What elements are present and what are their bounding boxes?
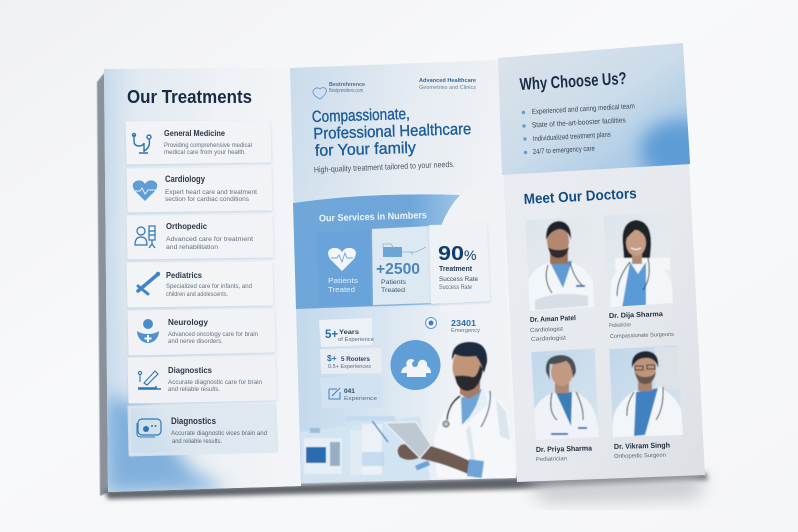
stat: years of experience: of Experience xyxy=(338,337,374,343)
card: neurology: Advanced oncology care for brain xyxy=(168,331,258,338)
stat: emergency: Emergency xyxy=(451,328,480,334)
stat: patients treated: Treated xyxy=(328,285,355,294)
lower section background xyxy=(296,300,516,483)
card: general medicine xyxy=(127,122,270,163)
specialty: Pediatrician xyxy=(536,456,567,463)
stat: years of experience: Years xyxy=(339,329,359,336)
panel: why choose us and doctors xyxy=(498,43,720,482)
stat: experience count: 041 xyxy=(344,388,355,395)
card: general medicine: medical care from your health. xyxy=(164,149,246,156)
stat: doctors xyxy=(321,349,381,373)
doctor card: Dija Sharma: Compassionate Surgeons xyxy=(610,332,674,340)
right side pale curve xyxy=(440,176,507,312)
stat: emergency xyxy=(426,318,480,334)
section heading: Our Services in Numbers xyxy=(319,210,427,224)
header right text xyxy=(419,78,477,91)
stat: doctors: 0.5+ Experiences xyxy=(328,364,372,370)
card: pediatrics: Specialized care for infants, and xyxy=(166,283,252,290)
panel: our treatments xyxy=(104,68,301,492)
stat: 2500 patients: Patients xyxy=(381,279,407,286)
icon: stethoscope xyxy=(132,134,151,153)
card: neurology xyxy=(129,310,274,354)
title: Professional Healthcare xyxy=(313,121,472,143)
brochure drop shadows xyxy=(97,72,708,502)
card: pediatrics xyxy=(128,263,272,306)
card: orthopedic: Advanced care for treatment xyxy=(166,236,253,243)
stat: doctors: $+ xyxy=(327,353,337,363)
card: cardiology: section for cardiac conditions xyxy=(165,196,250,203)
card: orthopedic: Orthopedic xyxy=(166,221,207,231)
name: Dr. Priya Sharma xyxy=(536,444,593,454)
card: diagnostics: Diagnostics xyxy=(168,365,212,375)
doctor card: Dija Sharma xyxy=(603,213,675,340)
stat: patients treated: Patients xyxy=(328,276,358,285)
stat: years of experience: 5+ xyxy=(325,329,338,341)
stat: 90 percent: Success Rate xyxy=(439,285,473,291)
benefits list xyxy=(522,101,635,156)
header right text: Geometries and Clinics xyxy=(419,85,476,91)
stat: 2500 patients xyxy=(372,226,432,305)
card: pediatrics: Pediatrics xyxy=(166,270,202,280)
card: diagnostics: and reliable results. xyxy=(168,386,220,393)
why choose us background xyxy=(498,43,690,175)
specialty: Orthopedic Surgeon xyxy=(614,453,666,460)
icon: diagnostics monitor xyxy=(137,419,161,437)
benefits list: Individualized treatment plans xyxy=(533,130,611,143)
stat: years of experience xyxy=(320,319,374,346)
panel background xyxy=(290,60,516,483)
icon: care team circle xyxy=(390,340,440,390)
card: cardiology: Expert heart care and treatment xyxy=(165,189,257,196)
card: pediatrics: children and adolescents. xyxy=(166,291,228,298)
icon: chart box xyxy=(329,388,340,399)
doctor card: Aman Patel xyxy=(525,216,596,343)
header logo: Bestreference xyxy=(329,82,365,88)
name: Dr. Dija Sharma xyxy=(609,311,663,320)
card: orthopedic: and rehabilitation xyxy=(166,244,218,251)
specialty: Pediatrician xyxy=(609,322,631,329)
title: Compassionate, xyxy=(312,106,410,126)
stat: experience count: Experience xyxy=(344,396,377,402)
icon: orthopedic figure xyxy=(135,226,155,248)
specialty: Cardiologist xyxy=(530,327,563,334)
title xyxy=(312,104,472,160)
card: diagnostics devices xyxy=(129,405,277,455)
heading: meet our doctors: Meet Our Doctors xyxy=(523,186,637,208)
benefits list: State of the-art-booster facilities xyxy=(532,115,626,129)
icon: heart xyxy=(133,180,157,201)
photo xyxy=(609,345,685,438)
heading: Our Treatments xyxy=(127,87,252,107)
card: diagnostics xyxy=(129,357,275,402)
icon: heart pulse xyxy=(328,248,356,271)
stat: 90 percent xyxy=(430,225,489,303)
benefits list: Experienced and caring medical team xyxy=(532,101,635,116)
stat: 2500 patients: +2500 xyxy=(376,261,420,278)
icon: diagnostics instrument xyxy=(138,371,161,389)
photo xyxy=(531,348,600,441)
name: Dr. Aman Patel xyxy=(530,315,576,324)
doctor card: Priya Sharma xyxy=(531,348,600,463)
stat: 90 percent: Success Rate xyxy=(439,276,478,283)
stat: doctors: 5 Rooters xyxy=(341,356,370,363)
lower sheet background xyxy=(498,43,705,482)
card: neurology: and nerve disorders. xyxy=(168,338,223,345)
benefits list: 24/7 to emergency care xyxy=(533,144,595,156)
card: orthopedic xyxy=(128,216,272,258)
header right text: Advanced Healthcare xyxy=(419,78,477,84)
stat: 90 percent: % xyxy=(464,247,476,263)
illustration: doctor with tablet xyxy=(385,342,515,478)
header logo: Bestproviders.com xyxy=(329,88,363,94)
card: diagnostics: Accurate diagnostic care for brain xyxy=(168,379,262,386)
subtitle: High-quality treatment tailored to your needs. xyxy=(314,160,455,174)
panel: center cover xyxy=(290,60,516,484)
illustration: hospital equipment xyxy=(300,416,430,484)
panel background xyxy=(104,68,301,492)
services section background xyxy=(293,194,460,309)
stat: experience count xyxy=(320,375,383,408)
card: diagnostics devices: Accurate diagnostic vices brain and xyxy=(171,430,267,437)
stat: 2500 patients: Treated xyxy=(381,287,405,294)
card: general medicine: Providing comprehensive medical xyxy=(164,142,252,149)
photo xyxy=(603,213,675,308)
icon: bone xyxy=(138,273,159,294)
stat: 90 percent: Treatment xyxy=(439,266,473,273)
stat: 90 percent: 90 xyxy=(438,243,464,265)
card: diagnostics devices: and reliable results. xyxy=(172,438,222,445)
card: general medicine: General Medicine xyxy=(164,128,225,138)
title: for Your family xyxy=(315,140,416,160)
header logo xyxy=(313,82,365,99)
stat: patients treated xyxy=(317,230,373,306)
icon: neurology cross xyxy=(137,319,159,343)
card: cardiology: Cardiology xyxy=(165,174,205,184)
icon: folder xyxy=(383,244,426,257)
doctor card: Aman Patel: Cardiologist xyxy=(531,335,566,343)
name: Dr. Vikram Singh xyxy=(614,441,670,451)
doctor card: Vikram Singh xyxy=(609,345,685,460)
stat: emergency: 23401 xyxy=(451,319,477,328)
card: cardiology xyxy=(128,169,271,211)
card: diagnostics devices: Diagnostics xyxy=(171,416,216,426)
card: neurology: Neurology xyxy=(168,317,208,327)
heading: why choose us: Why Choose Us? xyxy=(519,69,627,94)
photo xyxy=(525,216,596,312)
